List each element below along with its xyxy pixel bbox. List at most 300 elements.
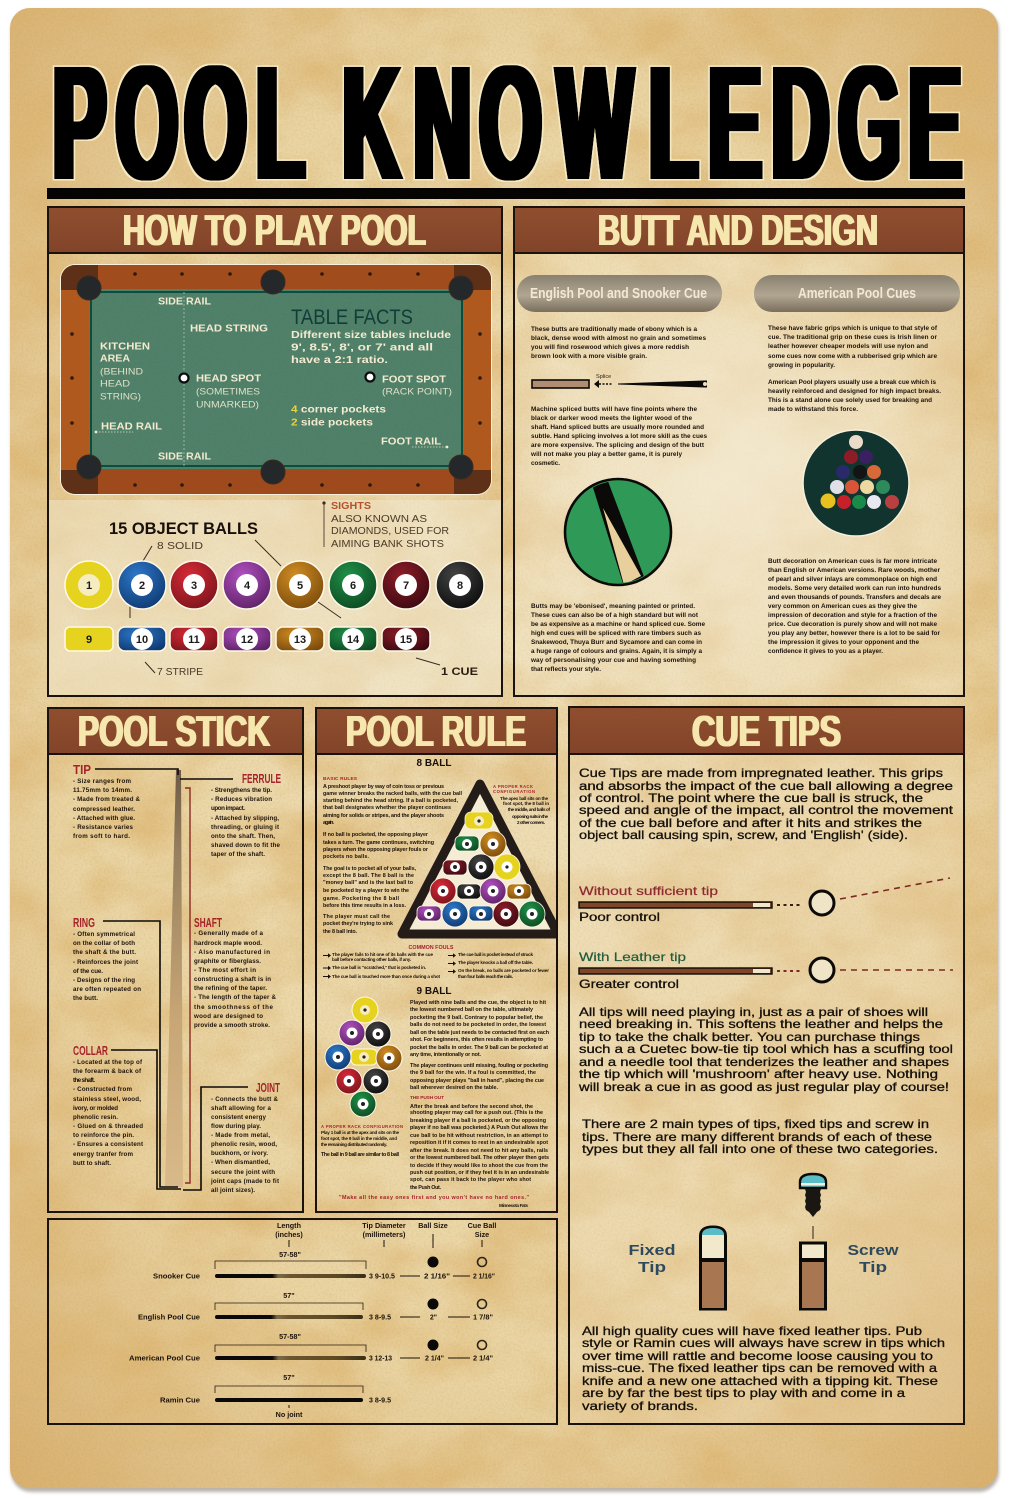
- text: english machine spliced: cosmetic.: [531, 460, 560, 467]
- icon: screw tip: Tip: [859, 1259, 887, 1276]
- text: playing in: [578, 1005, 953, 1094]
- text: basic rules: before this time results in a loss.: [323, 903, 406, 909]
- text: proper rack 9 ball: A PROPER RACK CONFIGURATION: [321, 1124, 403, 1129]
- text: cue tips intro: object ball causing spin, screw, and 'English' (side).: [579, 828, 908, 842]
- text: english ebonised: way of personalising your cue and having something: [530, 657, 696, 664]
- pool table diagram: have a 2:1 ratio.: [291, 355, 388, 366]
- text: american decoration: Butt decoration on American cues is far more intricate: [768, 558, 937, 565]
- text: common fouls: COMMON FOULS: [409, 945, 454, 951]
- part: collar: - Located at the top of: [73, 1059, 143, 1066]
- text: two types: There are 2 main types of tips, fixed tips and screw in: [582, 1117, 929, 1131]
- pool table diagram: 9', 8.5', 8', or 7' and all: [291, 342, 433, 354]
- part: shaft: wood are designed to: [193, 1013, 263, 1020]
- row: ramin cue: 3 8-9.5: [369, 1396, 391, 1404]
- text: english ebonised: Butts may be 'ebonised', meaning painted or printed.: [531, 603, 695, 610]
- pill heading: english cue: English Pool and Snooker Cue: [530, 285, 707, 302]
- pool table diagram: FOOT RAIL: [381, 436, 441, 448]
- icon: fixed tip: Fixed: [628, 1242, 676, 1259]
- solid balls row: 3: [191, 580, 197, 592]
- text: basic rules: The goal is to pocket all of your balls,: [323, 866, 416, 872]
- part: tip: TIP: [73, 762, 91, 777]
- row: ramin cue: No joint: [276, 1410, 303, 1419]
- text: basic rules: players when the opposing player fouls or: [323, 847, 429, 853]
- part: collar: to reinforce the pin.: [73, 1132, 134, 1139]
- text: 9 ball rules: opposing player plays "ball in hand", placing the cue: [410, 1078, 544, 1084]
- text: basic rules: The player must call the: [323, 914, 390, 920]
- solid balls row: 8: [457, 580, 463, 592]
- part: tip: compressed leather.: [73, 806, 135, 813]
- text: 9 ball rules: spot, can pass it back to the player who shot: [410, 1177, 531, 1183]
- text: cue tips intro: [579, 766, 954, 842]
- text: cue tips intro: Cue Tips are made from impregnated leather. This grips: [579, 766, 943, 780]
- text: 9 ball rules: ball on the table just needs to be contacted first on each: [410, 1030, 549, 1036]
- part: shaft: the smoothness of the: [194, 1004, 274, 1011]
- row: ramin cue: Ramin Cue: [160, 1396, 200, 1404]
- pool table diagram: (RACK POINT): [382, 386, 452, 398]
- text: american grips: made to withstand this force.: [768, 406, 858, 413]
- text: english machine spliced: Machine spliced butts will have fine points where the: [531, 406, 697, 413]
- text: english intro: [531, 326, 706, 360]
- text: 9 ball rules: pocketing the 9 ball. Contrary to popular belief, the: [410, 1015, 543, 1021]
- striped balls row: 9: [86, 634, 92, 646]
- part: ferrule: shaved down to fit the: [211, 842, 281, 849]
- part: collar: phenolic resin.: [73, 1114, 118, 1121]
- text: basic rules: BASIC RULES: [323, 776, 358, 782]
- text: common fouls: The cue ball is "scratched," that is pocketed in.: [332, 965, 426, 970]
- solid balls row: 4: [244, 580, 251, 592]
- text: cue tips intro: speed and angle of the impact, all control the movement: [579, 803, 954, 817]
- part: joint: all joint sizes).: [211, 1187, 255, 1194]
- text: proper rack 9 ball: foot spot, the 9 ball in the middle, and: [321, 1136, 397, 1141]
- text: common fouls: On the break, no balls are pocketed or fewer: [458, 968, 549, 973]
- text: english intro: brown look with a more visible grain.: [531, 353, 647, 360]
- text: playing in: tip to take the chalk better. You can purchase things: [579, 1030, 920, 1044]
- column headers: Size: [475, 1230, 489, 1239]
- text: basic rules: pocket they're trying to sink: [323, 921, 393, 927]
- diagram: without sufficient tip: Poor control: [579, 910, 660, 924]
- text: high quality cues: knife and a new one attached with a tipping kit. These: [582, 1374, 939, 1388]
- text: english ebonised: [530, 603, 705, 673]
- column: american pool cues: [754, 275, 960, 655]
- part: ring: the butt.: [73, 995, 98, 1002]
- icon: cue butt close-up: [565, 476, 671, 590]
- text: 9 ball rules: The player continues until missing, fouling or pocketing: [410, 1063, 548, 1069]
- text: english ebonised: high end cues will be spliced with rare timbers such as: [531, 630, 701, 637]
- text: basic rules: game winner breaks the racked balls, with the cue ball: [323, 791, 462, 797]
- part: ring: are often repeated on: [73, 986, 141, 993]
- text: english intro: These butts are traditionally made of ebony which is a: [531, 326, 697, 333]
- row: american pool cue: 57-58": [279, 1332, 301, 1341]
- label: sights: [322, 501, 449, 550]
- label: 8 solid: [130, 540, 341, 618]
- part: ferrule: FERRULE: [242, 771, 281, 786]
- pool table diagram: (SOMETIMES: [196, 386, 260, 398]
- text: basic rules: starting behind the head string. If a ball is pocketed,: [323, 798, 458, 804]
- row: english pool cue: 3 8-9.5: [369, 1312, 391, 1322]
- text: high quality cues: are by far the best tips to play with and come in a: [582, 1386, 906, 1400]
- part: ring: - Reinforces the joint: [73, 959, 138, 966]
- label: 1 cue: 1 CUE: [441, 666, 478, 678]
- panel: butt and design: [514, 206, 964, 696]
- label: sights: AIMING BANK SHOTS: [331, 539, 444, 550]
- heading: pool stick: POOL STICK: [78, 707, 270, 756]
- heading: butt and design: BUTT AND DESIGN: [598, 206, 878, 255]
- diagram: with leather tip: Greater control: [579, 977, 679, 991]
- text: common fouls: The cue ball is pocket instead of struck: [458, 952, 533, 957]
- diagram: with leather tip: [579, 950, 953, 991]
- text: basic rules: "money ball" and is the last ball to: [323, 880, 414, 886]
- part: ferrule: threading, or gluing it: [211, 824, 279, 831]
- part: shaft: - The most effort in: [194, 967, 256, 974]
- text: high quality cues: style or Ramin cues will always have screw in tips which: [582, 1336, 945, 1350]
- title: POOL KNOWLEDGE: [53, 33, 962, 215]
- text: 9 ball rules: cue ball to be hit without restriction, in an attempt to: [410, 1133, 549, 1139]
- text: proper rack 8 ball: 2 other corners.: [517, 820, 545, 825]
- text: american decoration: [768, 558, 941, 655]
- text: american grips: growing in popularity.: [768, 362, 835, 369]
- striped balls row: 12: [241, 634, 253, 646]
- part: collar: butt to shaft.: [73, 1160, 111, 1167]
- pool table diagram: 2 side pockets: [291, 418, 374, 428]
- text: basic rules: aiming for solids or stripes, and the player shoots: [323, 813, 444, 819]
- panel: pool stick: [48, 707, 303, 1212]
- quote: Minnesota Fats: [499, 1203, 528, 1208]
- solid balls row: [65, 561, 484, 609]
- text: playing in: will break a cue in as good as just regular play of course!: [578, 1080, 949, 1094]
- pool table diagram: UNMARKED): [196, 400, 259, 410]
- text: proper rack 9 ball: The ball in 9 ball are similar to 8 ball: [321, 1152, 400, 1158]
- text: two types: tips. There are many different brands of each of these: [582, 1130, 933, 1144]
- part: collar: ivory, or molded: [73, 1105, 118, 1112]
- part: collar: the shaft.: [73, 1077, 95, 1084]
- text: american decoration: of pearl and silver inlays are commonplace on high end: [768, 576, 937, 583]
- label: sights: DIAMONDS, USED FOR: [331, 526, 449, 537]
- text: american grips: These have fabric grips which is unique to that style of: [768, 325, 938, 332]
- text: basic rules: that ball designates whether the player continues: [323, 805, 451, 811]
- part: ring: the shaft & the butt.: [73, 949, 136, 956]
- part: joint: flow during play.: [211, 1123, 261, 1130]
- part: tip: - Made from treated &: [73, 796, 141, 803]
- text: playing in: the tip which will 'mushroom' after heavy use. Nothing: [579, 1067, 938, 1081]
- text: basic rules: the 8 ball into.: [323, 929, 358, 935]
- text: american grips: some cues now come with a rubberised grip which are: [768, 353, 937, 360]
- part: tip: 11.75mm to 14mm.: [73, 787, 132, 794]
- text: playing in: and a needle tool that tenderizes the leather and shapes: [579, 1055, 949, 1069]
- part: shaft: provide a smooth stroke.: [194, 1022, 270, 1029]
- solid balls row: 2: [139, 580, 145, 592]
- text: basic rules: game. Pocketing the 8 ball: [323, 896, 400, 902]
- text: 9 ball rules: shot. For beginners, this often results in attempting to: [410, 1037, 544, 1043]
- pool table diagram: SIDE RAIL: [158, 296, 211, 308]
- row: american pool cue: 3 12-13: [369, 1354, 392, 1362]
- striped balls row: 15: [400, 634, 412, 646]
- diagram: with leather tip: With Leather tip: [579, 950, 687, 964]
- text: basic rules: takes a turn. The game continues, switching: [323, 840, 434, 846]
- text: proper rack 8 ball: CONFIGURATION: [493, 789, 535, 794]
- panel: cue tips: [569, 707, 964, 1424]
- diagram: splice: Splice: [596, 374, 611, 380]
- column headers: Ball Size: [418, 1221, 448, 1230]
- text: common fouls: ball before contacting other balls, if any.: [332, 957, 411, 962]
- text: high quality cues: variety of brands.: [582, 1399, 698, 1413]
- part: tip: from soft to hard.: [73, 833, 130, 840]
- column headers: (millimeters): [363, 1230, 406, 1239]
- text: proper rack 8 ball: A PROPER RACK: [493, 784, 533, 789]
- row: english pool cue: English Pool Cue: [138, 1312, 200, 1322]
- text: english ebonised: These cues can also be of a high standard but will not: [531, 612, 699, 619]
- pill heading: english cue: [517, 275, 722, 312]
- text: 9 ball rules: pocket the balls in order. The 9 ball can be pocketed at: [410, 1045, 548, 1051]
- part: joint: shaft allowing for a: [211, 1105, 272, 1112]
- row: american pool cue: 2 1/4": [425, 1354, 444, 1362]
- text: american decoration: very common on American cues as they give the: [768, 603, 917, 610]
- icon: screw tip: Screw: [848, 1242, 899, 1259]
- text: proper rack 8 ball: The apex ball sits on the: [500, 796, 548, 801]
- text: basic rules: be pocketed by a player to win the: [323, 888, 409, 894]
- text: 9 ball rules: ball wherever desired on the table.: [410, 1085, 498, 1091]
- striped balls row: 11: [188, 634, 200, 646]
- text: high quality cues: miss-cue. The fixed leather tips can be removed with a: [582, 1361, 938, 1375]
- pool table diagram: AREA: [100, 354, 130, 364]
- text: 9 ball rules: THE PUSH OUT: [410, 1095, 444, 1101]
- text: american decoration: than English or American versions. Rare woods, mother: [768, 567, 940, 574]
- text: two types: types but they all fall into one of these two categories.: [582, 1142, 938, 1156]
- text: basic rules: again.: [323, 820, 334, 826]
- striped balls row: [65, 627, 430, 651]
- part: joint: joint caps (made to fit: [210, 1178, 279, 1185]
- text: english ebonised: that reflects your style.: [531, 666, 601, 673]
- text: american decoration: and even thousands of pounds. Transfers and decals are: [768, 594, 941, 601]
- text: american grips: American Pool players usually use a break cue which is: [768, 379, 936, 386]
- pool table diagram: STRING): [100, 392, 141, 402]
- text: 9 ball rules: player if no ball was pocketed.) A Push Out allows the: [410, 1125, 548, 1131]
- diagram: 8 ball rack: [402, 784, 558, 934]
- striped balls row: 13: [294, 634, 306, 646]
- heading: 9 ball: 9 BALL: [416, 986, 452, 997]
- text: common fouls: The cue ball is touched more than once during a shot: [332, 974, 440, 979]
- text: 9 ball rules: [410, 1000, 549, 1191]
- part: shaft: constructing a shaft is in: [194, 976, 271, 983]
- text: english machine spliced: black or darker wood meets the lighter wood of the: [531, 415, 692, 422]
- part: shaft: - The length of the taper &: [194, 994, 277, 1001]
- pool table diagram: HEAD: [100, 378, 130, 390]
- label: 7 stripe: 7 STRIPE: [157, 667, 203, 678]
- icon: screw tip: [800, 1174, 899, 1309]
- diagram: without sufficient tip: [579, 878, 950, 924]
- pool table diagram: [60, 264, 492, 495]
- part: tip: - Attached with glue.: [73, 815, 135, 822]
- column headers: (inches): [275, 1230, 303, 1239]
- text: common fouls: The player fails to hit one of its balls with the cue: [332, 952, 433, 957]
- text: proper rack 9 ball: Play 1 ball is at the apex and sits on the: [321, 1130, 399, 1135]
- part: ring: - Designs of the ring: [73, 977, 135, 984]
- row: english pool cue: 1 7/8": [473, 1312, 493, 1322]
- text: 9 ball rules: Played with nine balls and the cue, the object is to hit: [410, 1000, 546, 1006]
- row: english pool cue: 57": [283, 1291, 295, 1300]
- pool table diagram: 4 corner pockets: [291, 404, 387, 416]
- part: joint: - Made from metal,: [211, 1132, 270, 1139]
- text: american decoration: confidence it gives to you as a player.: [768, 648, 883, 655]
- pool table diagram: KITCHEN: [100, 342, 150, 352]
- row: snooker cue: 57-58": [279, 1250, 301, 1259]
- label: 8 solid: 8 SOLID: [157, 541, 203, 552]
- text: american grips: heavily reinforced and designed for high impact breaks.: [768, 388, 941, 395]
- heading: cue tips: [569, 707, 964, 756]
- diagram: splice: [532, 374, 707, 388]
- solid balls row: 1: [86, 580, 92, 592]
- text: playing in: need breaking in. This softens the leather and helps the: [579, 1017, 944, 1031]
- pool table diagram: HEAD STRING: [190, 324, 268, 334]
- quote: "Make all the easy ones first and you won't have no hard ones.": [339, 1195, 529, 1201]
- title rule: [47, 188, 965, 199]
- part: ring: RING: [73, 915, 95, 930]
- quote: [339, 1195, 529, 1208]
- text: cue tips intro: and absorbs the impact of the cue ball allowing a degree: [579, 779, 954, 793]
- part: shaft: graphite or fiberglass.: [194, 958, 261, 965]
- text: high quality cues: [582, 1324, 945, 1413]
- text: basic rules: A preshoot player by way of coin toss or previous: [323, 784, 444, 790]
- label: 7 stripe: [145, 662, 203, 678]
- text: american decoration: price. Cue decoration is purely show and will not make: [768, 621, 937, 628]
- row: snooker cue: 2 1/16": [473, 1272, 495, 1280]
- striped balls row: 10: [136, 634, 148, 646]
- row: ramin cue: [160, 1373, 391, 1419]
- column headers: Cue Ball: [468, 1221, 496, 1230]
- part: joint: buckhorn, or ivory.: [211, 1150, 268, 1157]
- text: two types: [582, 1117, 938, 1156]
- pool table diagram: HEAD RAIL: [101, 422, 162, 432]
- part: ferrule: onto the shaft. Then,: [211, 833, 275, 840]
- pool table diagram: SIDE RAIL: [158, 452, 211, 462]
- icon: fixed tip: [628, 1227, 726, 1309]
- text: 9 ball rules: After the break and before the second shot, the: [410, 1104, 533, 1110]
- part: ferrule: [211, 771, 281, 858]
- panel: how to play pool: [48, 206, 502, 696]
- pool table diagram: TABLE FACTS: [291, 306, 413, 329]
- part: ring: [73, 915, 141, 1002]
- text: american decoration: the impression it gives to your opponent and the: [768, 639, 919, 646]
- row: snooker cue: 2 1/16": [424, 1272, 451, 1280]
- diagram: cue stick with leader lines: [95, 769, 248, 1190]
- text: american grips: [768, 325, 941, 413]
- text: american decoration: impression of decoration and style for a fraction of the: [768, 612, 937, 619]
- column headers: Tip Diameter: [362, 1221, 406, 1230]
- icon: fixed tip: Tip: [638, 1259, 666, 1276]
- part: ferrule: - Strengthens the tip.: [211, 787, 272, 794]
- solid balls row: 6: [350, 580, 356, 592]
- text: english ebonised: Snakewood, Thuya Burr and Sycamore and can come in: [531, 639, 702, 646]
- text: english machine spliced: [530, 406, 707, 467]
- part: shaft: the refining of the taper.: [194, 985, 267, 992]
- text: 9 ball rules: any time, intentionally or not.: [410, 1052, 482, 1058]
- text: high quality cues: over time will rattle and become loose causing you to: [582, 1349, 934, 1363]
- row: american pool cue: American Pool Cue: [129, 1354, 200, 1362]
- part: tip: - Resistance varies: [73, 824, 134, 831]
- pill heading: american cues: American Pool Cues: [798, 285, 916, 302]
- text: proper rack 8 ball: the middle, and balls of: [508, 807, 550, 812]
- pill heading: american cues: [754, 275, 960, 312]
- text: proper rack 9 ball: [321, 1124, 403, 1158]
- heading: 8 ball: 8 BALL: [416, 758, 452, 769]
- text: 9 ball rules: push out position, or if they feel it is in an undesirable: [410, 1170, 549, 1176]
- label: 1 cue: [416, 658, 478, 678]
- part: ring: of the cue.: [73, 968, 103, 975]
- text: american grips: This is a stand alone cue solely used for breaking and: [768, 397, 932, 404]
- column headers: Length: [277, 1221, 301, 1230]
- part: collar: - Ensures a consistent: [73, 1141, 143, 1148]
- text: 9 ball rules: to decide if they would like to shoot the cue from the: [410, 1163, 548, 1169]
- part: collar: - Constructed from: [73, 1086, 132, 1093]
- part: collar: - Glued on & threaded: [73, 1123, 143, 1130]
- heading: how to play pool: HOW TO PLAY POOL: [123, 206, 426, 255]
- text: english intro: black, dense wood with almost no grain and sometimes: [531, 335, 706, 342]
- label: 15 object balls: 15 OBJECT BALLS: [109, 520, 258, 538]
- part: collar: stainless steel, wood,: [73, 1096, 141, 1103]
- text: american grips: cue. The traditional grip on these cues is Irish linen or: [768, 334, 938, 341]
- text: english machine spliced: shaft. Hand spliced butts are usually more rounded and: [531, 424, 704, 431]
- text: american decoration: you play any better, however there is a lot to be said for: [768, 630, 940, 637]
- text: american grips: leather however cheaper models will use nylon and: [768, 343, 928, 350]
- text: common fouls: than four balls reach the rails.: [458, 974, 513, 979]
- text: 9 ball rules: the Push Out.: [410, 1185, 442, 1191]
- text: basic rules: except the 8 ball. The 8 ball is the: [323, 873, 414, 879]
- text: basic rules: [323, 776, 462, 935]
- text: common fouls: [323, 945, 549, 979]
- text: 9 ball rules: breaking player if a ball is pocketed, or the opposing: [410, 1118, 546, 1124]
- part: joint: consistent energy: [211, 1114, 267, 1121]
- part: shaft: [193, 915, 277, 1029]
- text: 9 ball rules: after the break. It does not need to hit any balls, rails: [410, 1148, 548, 1154]
- pool table diagram: Different size tables include: [291, 330, 452, 341]
- text: american decoration: models. Some very detailed work can run into hundreds: [768, 585, 941, 592]
- panel: cue comparison table: [48, 1219, 557, 1424]
- part: ring: - Often symmetrical: [73, 931, 135, 938]
- row: english pool cue: [138, 1291, 493, 1322]
- column headers: [275, 1221, 496, 1248]
- text: high quality cues: All high quality cues will have fixed leather tips. Pub: [582, 1324, 923, 1338]
- row: ramin cue: 57": [283, 1373, 295, 1382]
- text: english machine spliced: are more expensive. The splicing and design of the butt: [531, 442, 705, 449]
- text: english ebonised: a huge range of colours and grains. Again, it is simply a: [531, 648, 702, 655]
- pool table diagram: FOOT SPOT: [382, 374, 446, 386]
- part: collar: [73, 1043, 143, 1167]
- part: collar: energy tranfer from: [73, 1151, 133, 1158]
- heading: cue tips: CUE TIPS: [692, 707, 841, 756]
- part: collar: COLLAR: [73, 1043, 108, 1058]
- label: sights: ALSO KNOWN AS: [331, 514, 427, 525]
- column: english pool and snooker cue: [517, 275, 722, 673]
- text: proper rack 8 ball: [493, 784, 550, 825]
- row: snooker cue: [153, 1250, 495, 1280]
- striped balls row: 14: [347, 634, 360, 646]
- text: basic rules: pockets no balls.: [323, 854, 370, 860]
- text: cue tips intro: of the cue ball before and after it hits and strikes the: [579, 816, 923, 830]
- text: 9 ball rules: or the lowest numbered ball. The other player then gets: [410, 1155, 549, 1161]
- text: 9 ball rules: balls do not need to be pocketed in order, the lowest: [410, 1022, 546, 1028]
- part: ferrule: upon impact.: [211, 805, 245, 812]
- part: tip: - Size ranges from: [73, 778, 131, 785]
- part: joint: JOINT: [256, 1080, 280, 1095]
- part: shaft: - Also manufactured in: [194, 949, 270, 956]
- text: 9 ball rules: shooting player may call for a push out. (This is the: [410, 1110, 543, 1116]
- row: english pool cue: 2": [430, 1312, 437, 1322]
- text: english intro: you will find rosewood which gives a more reddish: [531, 344, 689, 351]
- text: 9 ball rules: reposition it if it comes to rest in an undesirable spot: [410, 1140, 548, 1146]
- solid balls row: 7: [403, 580, 409, 592]
- part: shaft: hardrock maple wood.: [194, 940, 262, 947]
- icon: racked balls: [803, 430, 909, 536]
- part: joint: secure the joint with: [211, 1169, 275, 1176]
